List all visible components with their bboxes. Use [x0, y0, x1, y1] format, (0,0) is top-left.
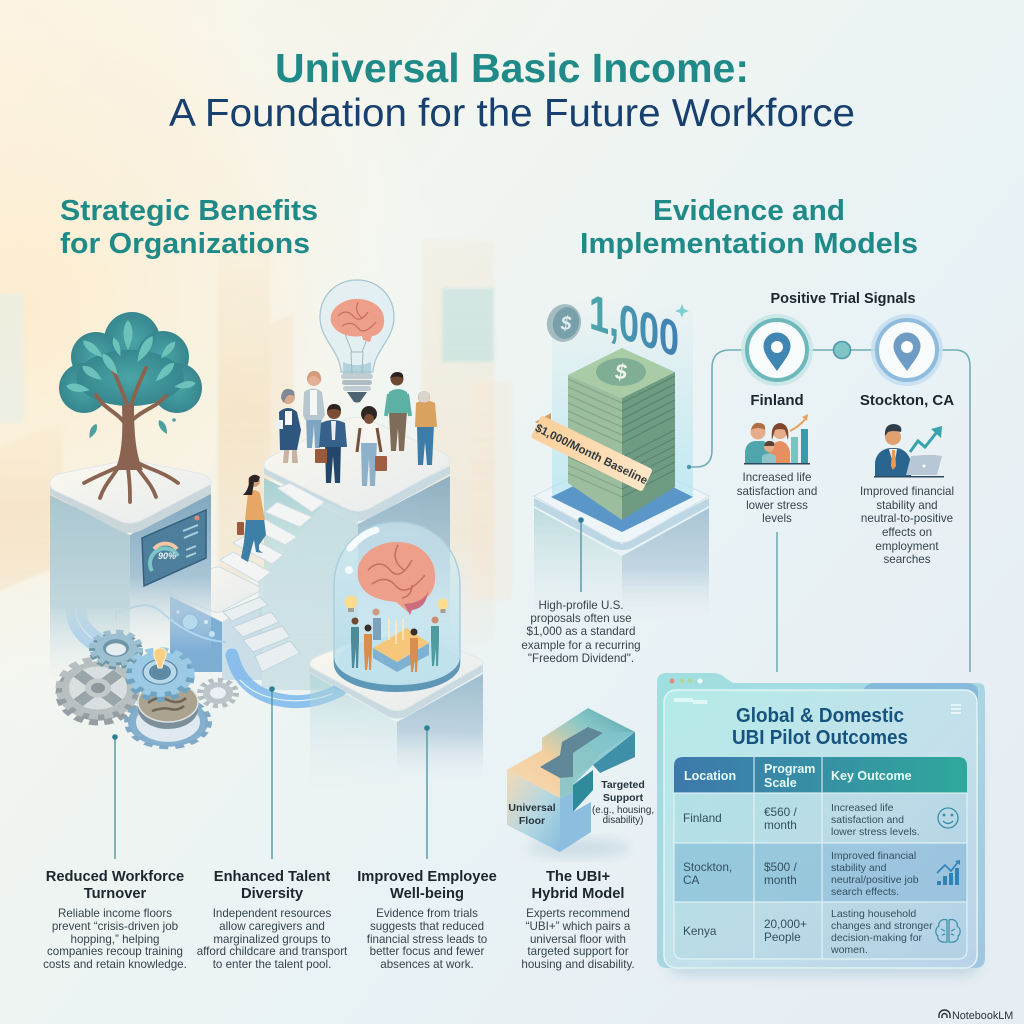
model: the UBI+ hybrid model: Experts recommend	[526, 907, 630, 920]
channel	[540, 727, 603, 778]
panel: global and domestic pilot outcomes	[657, 673, 985, 976]
text: Stockton result	[860, 485, 954, 566]
person: man orange sweater	[415, 391, 437, 465]
bulb brain	[331, 299, 384, 342]
lower stair block	[170, 567, 300, 680]
label: Stockton, CA: Stockton, CA	[860, 392, 954, 409]
benefit: enhanced talent diversity: Independent resources	[213, 907, 331, 920]
person: climbing woman	[237, 475, 266, 562]
location pin: Finland	[741, 314, 813, 386]
under-stair wall	[258, 502, 358, 690]
illustration: data flow stream	[56, 512, 340, 702]
title: Universal Basic Income:	[275, 45, 749, 91]
small people under dome	[351, 608, 439, 672]
gear: blue with bulb	[129, 648, 191, 699]
caption: high-profile U.S. proposals	[521, 599, 641, 665]
falling leaves	[87, 418, 176, 440]
text: Stockton result: effects on	[882, 526, 932, 539]
benefit: improved employee well-being: absences at work.	[380, 958, 474, 971]
panel title	[732, 704, 908, 749]
benefit: reduced workforce turnover: companies recoup training	[47, 945, 183, 958]
label: universal floor: Universal	[508, 802, 556, 814]
gear: far right grey	[200, 680, 236, 706]
title	[169, 45, 855, 135]
panel title: Global & Domestic	[736, 704, 904, 727]
icon: family with rising bars	[744, 414, 810, 464]
benefit: reduced workforce turnover	[43, 869, 187, 971]
illustration: tree on platform	[50, 312, 211, 680]
blue base plate	[551, 473, 693, 532]
row: Stockton: $500 /	[764, 860, 798, 874]
label: targeted support: disability)	[603, 815, 643, 826]
benefit: reduced workforce turnover: prevent “crisis-driven job	[52, 920, 178, 933]
label: targeted support: Support	[603, 792, 644, 804]
row: Kenya: 20,000+	[764, 917, 807, 931]
benefit: reduced workforce turnover: Turnover	[84, 886, 147, 902]
row: Finland: Finland	[683, 811, 722, 825]
heading: strategic benefits	[60, 195, 318, 260]
connector line: stack to caption	[578, 517, 584, 592]
illustration: group of people on platform	[237, 371, 437, 562]
caption: high-profile U.S. proposals: "Freedom Dividend".	[528, 652, 634, 665]
left face	[507, 770, 560, 852]
top surface	[507, 708, 635, 798]
dome platform	[310, 628, 483, 790]
tree trunk and roots	[84, 368, 178, 502]
coin: $	[560, 314, 572, 335]
row: Stockton: Improved financial	[831, 850, 916, 862]
benefit: enhanced talent diversity: afford childcare and transport	[197, 945, 348, 958]
row: Finland	[683, 802, 958, 838]
person: woman white top	[357, 406, 387, 486]
row: Finland: lower stress levels.	[831, 826, 920, 838]
sparkle	[675, 304, 689, 318]
dome light bulbs	[344, 596, 448, 613]
timeline connector	[687, 350, 970, 672]
heading: evidence and implementation models: Evidence and	[653, 195, 845, 227]
benefit: improved employee well-being	[357, 869, 497, 971]
heading: strategic benefits: for Organizations	[60, 228, 310, 260]
illustration: brain under glass dome	[310, 522, 483, 790]
benefit: reduced workforce turnover: costs and retain knowledge.	[43, 958, 187, 971]
cash stack: $	[614, 361, 627, 384]
glass column	[552, 300, 693, 532]
benefit: improved employee well-being: Evidence from trials	[376, 907, 478, 920]
caption: high-profile U.S. proposals: High-profile U.S.	[538, 599, 624, 612]
row: Stockton: month	[764, 873, 797, 887]
label: targeted support: Targeted	[601, 779, 645, 791]
heading: evidence and implementation models: Implementation Models	[580, 228, 918, 260]
illustration: light bulb with brain	[320, 280, 394, 402]
connector lines: benefits	[112, 686, 430, 859]
illustration: $1,000 cash stack	[531, 283, 709, 625]
model: the UBI+ hybrid model: targeted support for	[527, 945, 629, 958]
row: Stockton: Stockton,	[683, 860, 732, 874]
table header: Location	[684, 769, 736, 783]
illustration: stairs and upper platform	[170, 418, 450, 700]
person: woman grey cardigan	[303, 371, 325, 448]
text: Finland result: satisfaction and	[737, 485, 817, 498]
benefit: enhanced talent diversity: to enter the talent pool.	[213, 958, 331, 971]
text: Stockton result: stability and	[876, 499, 938, 512]
benefit: enhanced talent diversity: allow caregivers and	[219, 920, 325, 933]
text: Stockton result: searches	[883, 553, 931, 566]
person: man teal sweater	[386, 372, 410, 451]
benefit: improved employee well-being: Well-being	[390, 886, 464, 902]
benefit: improved employee well-being: suggests that reduced	[370, 920, 484, 933]
browser window back	[657, 673, 985, 968]
location pin: Stockton	[871, 314, 943, 386]
model: the UBI+ hybrid model: Hybrid Model	[531, 886, 625, 902]
person: man in navy suit	[315, 404, 347, 483]
gear: rusty centre	[138, 682, 198, 729]
row: Finland: satisfaction and	[831, 814, 904, 826]
icon: manager with laptop and rising arrow	[874, 424, 944, 478]
label: universal floor: Floor	[519, 815, 545, 827]
row: Kenya: People	[764, 930, 801, 944]
row: Stockton: neutral/positive job	[831, 874, 919, 886]
table header: Key Outcome	[831, 769, 912, 783]
label: Finland: Finland	[750, 392, 804, 409]
row: Stockton: stability and	[831, 862, 887, 874]
dome brain	[358, 542, 435, 615]
row: Kenya: decision-making for	[831, 932, 923, 944]
NotebookLM logo: NotebookLM	[952, 1010, 1013, 1022]
icon: brain outline	[936, 920, 960, 942]
stack base platform	[534, 454, 709, 625]
table header: Scale	[764, 776, 797, 790]
model: the UBI+ hybrid model	[521, 869, 635, 971]
row: Stockton	[683, 850, 960, 898]
caption: high-profile U.S. proposals: $1,000 as a standard	[527, 625, 635, 638]
model: the UBI+ hybrid model: housing and disability.	[521, 958, 635, 971]
illustration: UBI+ hybrid block	[507, 708, 654, 857]
icon: smiley	[938, 808, 958, 828]
gear: top blue-grey	[92, 632, 140, 667]
benefit: enhanced talent diversity	[197, 869, 348, 971]
text: Stockton result: Improved financial	[860, 485, 954, 498]
left platform	[50, 460, 211, 680]
text: Stockton result: employment	[875, 540, 939, 553]
text: Finland result: levels	[762, 512, 792, 525]
row: Kenya: women.	[830, 944, 868, 956]
row: Finland: Increased life	[831, 802, 894, 814]
title: A Foundation for the Future Workforce	[169, 92, 855, 135]
label: targeted support	[592, 779, 654, 826]
banner: $1,000/Month Baseline: $1,000/Month Baseline	[533, 422, 649, 487]
row: Finland: €560 /	[764, 805, 798, 819]
connector node	[834, 342, 850, 358]
coin	[543, 300, 585, 346]
caption: high-profile U.S. proposals: example for a recurring	[521, 639, 641, 652]
label: universal floor	[508, 802, 556, 827]
front right face	[560, 792, 591, 852]
row: Kenya: Kenya	[683, 924, 717, 938]
table header	[684, 762, 912, 790]
row: Kenya	[683, 908, 960, 956]
benefit: reduced workforce turnover: Reliable income floors	[58, 907, 172, 920]
heading: positive trial signals: Positive Trial Signals	[770, 291, 916, 307]
gear: bottom blue	[127, 697, 209, 747]
model: the UBI+ hybrid model: The UBI+	[546, 869, 610, 885]
dashboard screen	[142, 510, 206, 586]
upper platform	[264, 418, 450, 700]
dashboard screen: 90%	[158, 551, 176, 561]
benefit: improved employee well-being: better focus and fewer	[370, 945, 484, 958]
icon: rising chart	[937, 860, 960, 885]
row: Stockton: CA	[683, 873, 700, 887]
panel title: UBI Pilot Outcomes	[732, 726, 908, 749]
illustration: gears	[59, 632, 236, 747]
heading: strategic benefits: Strategic Benefits	[60, 195, 318, 227]
benefit: improved employee well-being: Improved Employee	[357, 869, 497, 885]
label: targeted support: (e.g., housing,	[592, 805, 654, 816]
big 1,000 number: 1,000	[589, 283, 679, 368]
central glowing box	[373, 618, 429, 672]
benefit: improved employee well-being: financial stress leads to	[367, 933, 487, 946]
upper stair flight	[220, 483, 325, 582]
text: Finland result: Increased life	[743, 471, 811, 484]
table	[674, 757, 967, 959]
caption: high-profile U.S. proposals: proposals often use	[530, 612, 632, 625]
row: Finland: month	[764, 818, 797, 832]
panel shadow	[668, 700, 980, 976]
text: Finland result: lower stress	[746, 499, 808, 512]
tree crown	[59, 312, 202, 413]
person: woman navy suit	[276, 389, 301, 463]
row: Kenya: Lasting household	[831, 908, 916, 920]
row: Stockton: search effects.	[831, 886, 899, 898]
benefit: reduced workforce turnover: hopping,” helping	[71, 933, 159, 946]
heading: evidence and implementation models	[580, 195, 918, 260]
glass card	[664, 690, 977, 968]
tree leaves	[65, 320, 196, 394]
text: Stockton result: neutral-to-positive	[861, 512, 953, 525]
gear: large grey	[59, 659, 137, 723]
benefit: enhanced talent diversity: Diversity	[241, 886, 304, 902]
cash stack	[568, 348, 675, 520]
model: the UBI+ hybrid model: “UBI+” which pairs a	[526, 920, 631, 933]
benefit: reduced workforce turnover: Reduced Workforce	[46, 869, 184, 885]
text: Finland result	[737, 471, 817, 525]
row: Kenya: changes and stronger	[831, 920, 933, 932]
table header: Program	[764, 762, 815, 776]
benefit: enhanced talent diversity: Enhanced Talent	[214, 869, 330, 885]
benefit: enhanced talent diversity: marginalized groups to	[213, 933, 331, 946]
right face	[593, 732, 635, 773]
model: the UBI+ hybrid model: universal floor with	[530, 933, 626, 946]
